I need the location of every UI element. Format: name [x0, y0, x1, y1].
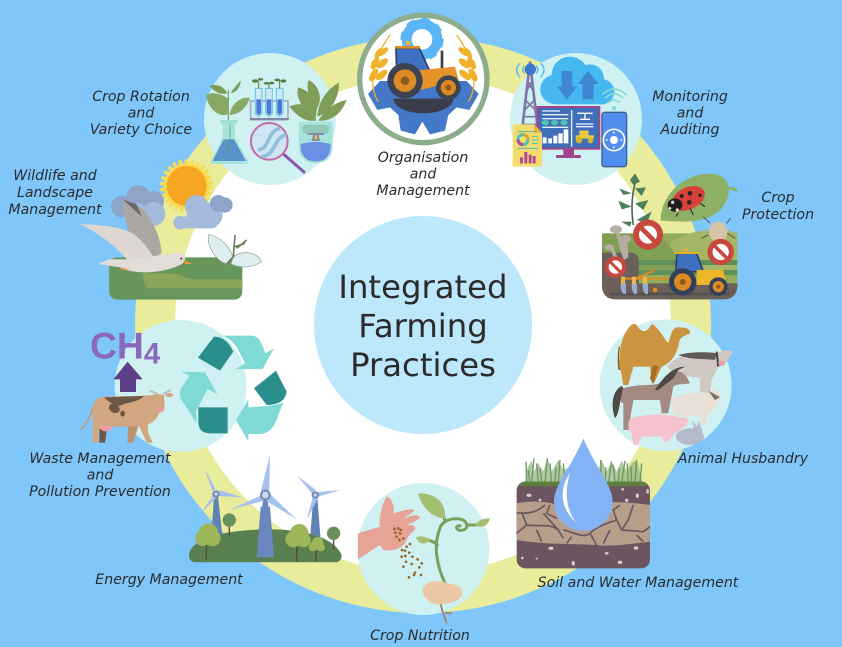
panel: wildlife and landscape management [79, 163, 262, 300]
panel: energy management [189, 455, 342, 562]
panel: crop nutrition [357, 483, 490, 623]
label: wildlife and landscape management [8, 168, 102, 218]
label: crop rotation and variety choice: Crop Rotation [92, 89, 190, 105]
panel: organisation and management [360, 15, 487, 143]
label: waste management and pollution prevention: Waste Management [29, 451, 171, 467]
centre circle with title: Practices [350, 346, 496, 384]
CH4 text: CH [90, 324, 144, 366]
label: organisation and management: Organisation [378, 150, 468, 166]
recycling arrows [180, 336, 287, 441]
centre circle with title: Integrated [338, 268, 508, 306]
panel: crop protection [602, 173, 737, 299]
label: organisation and management: and [410, 166, 437, 182]
icon: cow [81, 390, 173, 443]
label: crop nutrition: Crop Nutrition [370, 628, 470, 644]
label: crop protection [742, 190, 814, 223]
yellow ring [155, 57, 691, 593]
label: soil and water management: Soil and Water Management [538, 575, 739, 591]
label: organisation and management [376, 150, 470, 199]
centre circle with title [314, 216, 532, 434]
label: animal husbandry: Animal Husbandry [677, 451, 809, 467]
panel: crop rotation and variety choice [204, 53, 347, 185]
panel: soil and water management [517, 438, 650, 568]
label: wildlife and landscape management: Landscape [17, 185, 93, 201]
panel: waste management and pollution prevention [81, 320, 287, 452]
label: energy management: Energy Management [95, 572, 243, 588]
label: crop rotation and variety choice: Variety Choice [90, 122, 192, 138]
panel: animal husbandry [600, 319, 733, 451]
CH4 text: 4 [144, 337, 161, 370]
label: monitoring and auditing: Auditing [660, 122, 719, 138]
label: wildlife and landscape management: Management [8, 202, 102, 218]
label: monitoring and auditing [652, 89, 728, 138]
label: wildlife and landscape management: Wildlife and [13, 168, 98, 184]
centre circle with title: Farming [358, 307, 488, 345]
label: crop protection: Protection [742, 207, 814, 223]
label: waste management and pollution prevention [29, 451, 171, 500]
label: crop rotation and variety choice: and [128, 106, 155, 122]
label: crop protection: Crop [761, 190, 795, 206]
label: crop rotation and variety choice [90, 89, 192, 138]
label: monitoring and auditing: and [677, 106, 704, 122]
label: organisation and management: Management [376, 183, 470, 199]
label: monitoring and auditing: Monitoring [652, 89, 728, 105]
panel: monitoring and auditing [510, 53, 642, 185]
label: waste management and pollution prevention: Pollution Prevention [29, 484, 171, 500]
label: waste management and pollution prevention: and [87, 468, 114, 484]
